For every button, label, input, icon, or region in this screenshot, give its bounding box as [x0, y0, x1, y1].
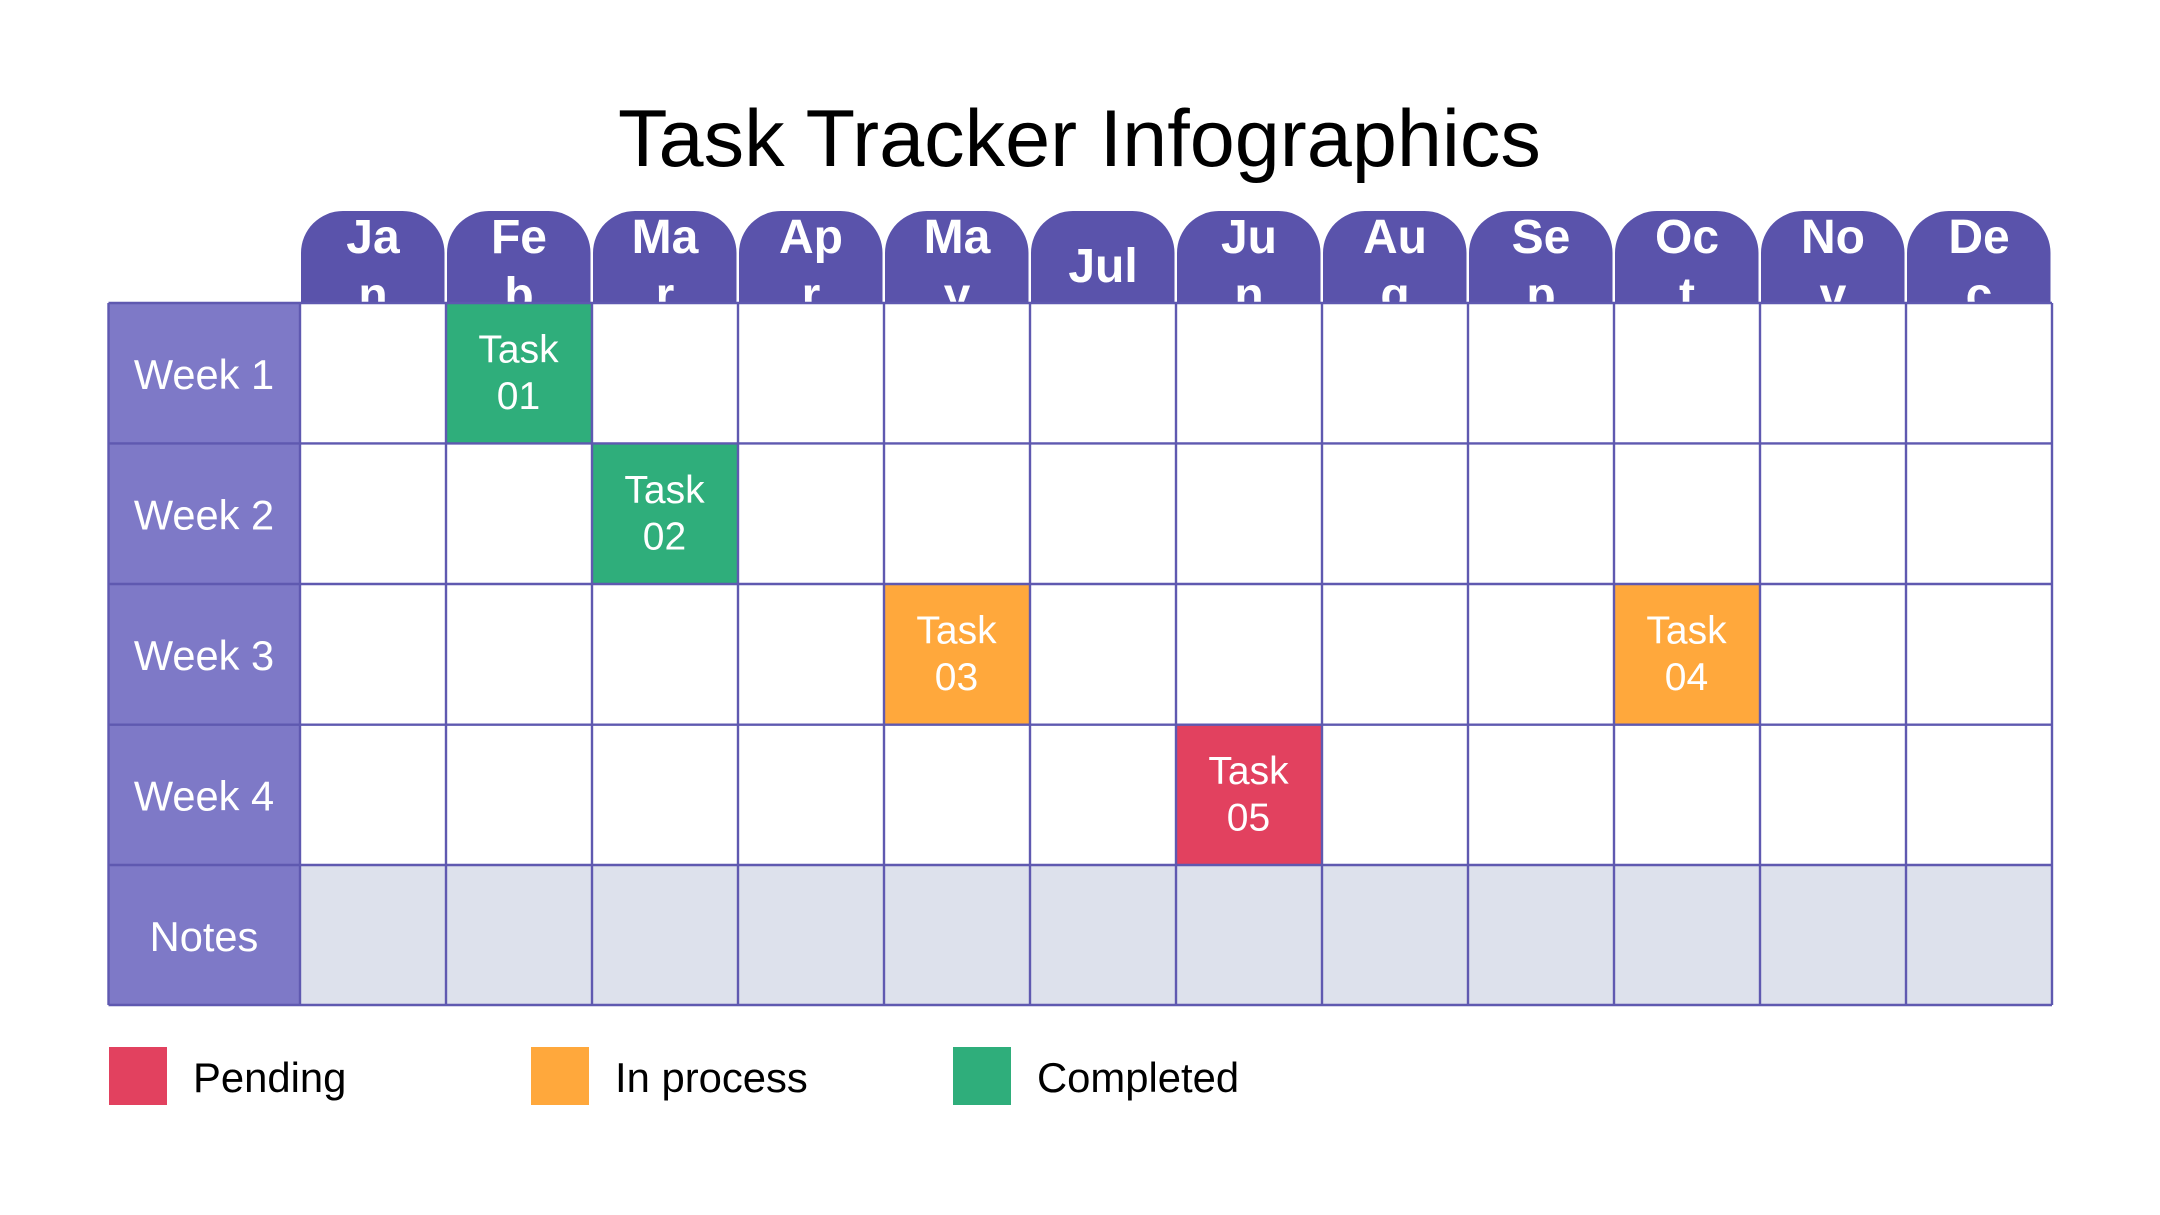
month header row: [301, 211, 2050, 302]
month: Jun: [1177, 211, 1320, 302]
month: Aug: [1323, 211, 1466, 302]
row label: Week 2: Week 2: [134, 492, 274, 538]
title: Task Tracker Infographics: [618, 94, 1541, 184]
legend: [109, 1047, 1239, 1105]
task label 01: 01: [497, 375, 540, 418]
task 04 cell: [1614, 584, 1760, 725]
month: Oct: [1615, 211, 1758, 302]
month: Sep: Se: [1512, 211, 1570, 264]
grid lines: [108, 303, 2052, 1005]
month: Jun: n: [1234, 269, 1264, 322]
month: Oct: Oc: [1655, 211, 1719, 264]
month: Mar: r: [656, 269, 674, 322]
tracker table: [108, 303, 2052, 1005]
month: Sep: p: [1526, 269, 1556, 322]
task label 03: Task: [916, 610, 997, 652]
month: Nov: [1761, 211, 1904, 302]
month: Nov: No: [1801, 211, 1865, 264]
task 03 cell: [884, 584, 1030, 725]
month: Mar: Ma: [632, 211, 699, 264]
month: Feb: Fe: [491, 211, 547, 264]
month: May: Ma: [924, 211, 991, 264]
month: Jul: Jul: [1068, 240, 1138, 293]
task label 04: 04: [1665, 656, 1708, 699]
legend item: Completed: Completed: [1037, 1054, 1239, 1101]
legend item: In process: [531, 1047, 808, 1105]
month: Aug: g: [1380, 269, 1410, 322]
task label 02: 02: [643, 516, 686, 558]
task label 05: Task: [1208, 750, 1289, 793]
month: Apr: r: [802, 269, 820, 322]
month: Nov: v: [1820, 269, 1847, 322]
month: Sep: [1469, 211, 1612, 302]
month: Aug: Au: [1363, 211, 1427, 264]
month: Jan: n: [358, 269, 388, 322]
month: Feb: b: [504, 269, 534, 322]
week label column: [109, 304, 300, 1005]
month: Dec: [1907, 211, 2050, 302]
task label 03: 03: [935, 656, 978, 699]
task label 05: 05: [1227, 796, 1270, 840]
month: Jan: [301, 211, 444, 302]
month: Dec: De: [1948, 211, 2010, 264]
legend item: Pending: [109, 1047, 346, 1105]
task 01 cell: [446, 303, 592, 443]
month: Jan: Ja: [346, 211, 400, 264]
month: Jul: [1031, 211, 1174, 303]
row label: Week 3: Week 3: [134, 632, 274, 679]
row label: Week 1: Week 1: [134, 351, 274, 398]
month: May: [885, 211, 1028, 302]
month: May: y: [944, 269, 971, 322]
notes row background: [300, 865, 2052, 1005]
task label 04: Task: [1646, 610, 1727, 652]
legend item: In process: In process: [615, 1054, 808, 1101]
month: Apr: [739, 211, 882, 302]
month: Oct: t: [1679, 269, 1695, 322]
row label: Week 4: Week 4: [134, 772, 274, 820]
task 02 cell: [592, 443, 738, 584]
month: Dec: c: [1966, 269, 1992, 322]
month: Apr: Ap: [779, 211, 843, 264]
row label: Notes: Notes: [150, 913, 258, 960]
task label 02: Task: [624, 469, 705, 512]
month: Mar: [593, 211, 736, 302]
legend item: Pending: Pending: [193, 1054, 346, 1101]
task 05 cell: [1176, 725, 1322, 865]
task label 01: Task: [478, 328, 559, 372]
legend item: Completed: [953, 1047, 1239, 1105]
month: Jun: Ju: [1221, 211, 1277, 264]
month: Feb: [447, 211, 590, 302]
